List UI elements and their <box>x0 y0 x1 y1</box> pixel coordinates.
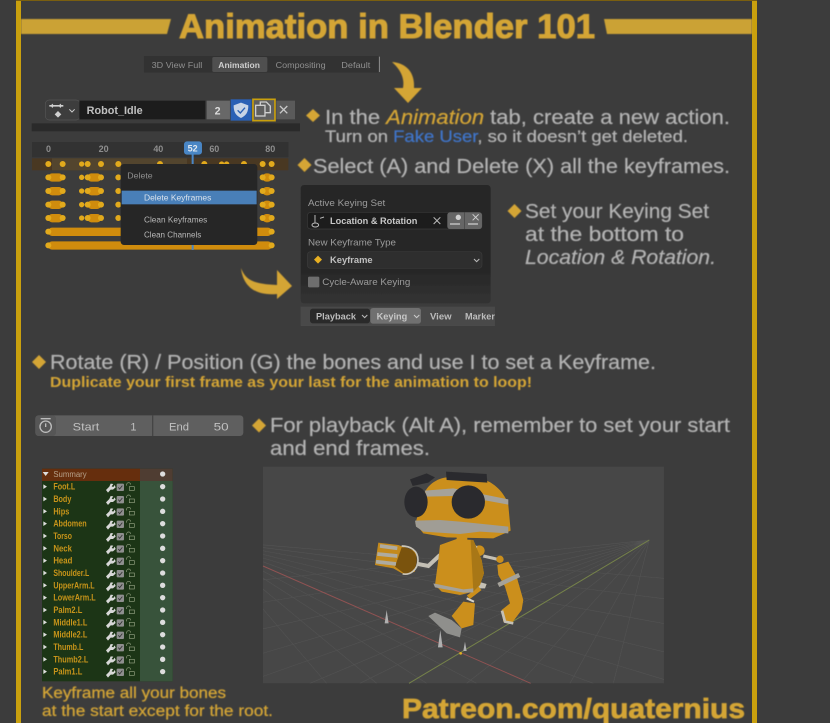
keyframe dots <box>45 161 275 248</box>
timeline with delete menu: 80 <box>265 144 275 154</box>
current frame marker: 52 <box>188 143 198 153</box>
channel rows: LowerArm.L <box>53 593 96 603</box>
workspace tabs: Default <box>341 60 371 70</box>
timeline with delete menu: 40 <box>153 144 163 154</box>
playback range bar: End <box>169 421 189 433</box>
body <box>433 536 484 595</box>
channel rows: Torso <box>53 531 72 541</box>
axes <box>263 566 531 683</box>
workspace tabs: Animation <box>218 60 260 70</box>
channel rows: Thumb2.L <box>53 654 89 664</box>
arrow: to keying panel <box>241 268 292 299</box>
arrow: down to tab text <box>392 62 422 103</box>
channel rows: Palm1.L <box>53 667 83 677</box>
bullet and text: rotate and position: Rotate (R) / Position (G) the bones and use I to set a Keyframe. <box>50 351 656 374</box>
action selector <box>32 99 300 131</box>
bullet and text: keying set: Set your Keying Set <box>525 200 709 223</box>
bullet and text: animation tab <box>306 106 730 146</box>
bone markers <box>385 610 467 651</box>
keying set popover: View <box>430 311 452 321</box>
floor grid <box>263 540 664 684</box>
current frame marker <box>184 141 202 155</box>
delete context menu: Delete Keyframes <box>144 192 211 202</box>
bullet and text: animation tab: In the Animation tab, create a new action. <box>325 106 730 129</box>
title left bar <box>21 19 171 34</box>
timeline with delete menu: 60 <box>209 144 219 154</box>
keying set popover: Cycle-Aware Keying <box>322 277 410 287</box>
action selector: 2 <box>215 105 221 117</box>
caption: keyframe bones: at the start except for the root. <box>42 703 273 720</box>
channel rows: Body <box>53 494 71 504</box>
caption: keyframe bones: Keyframe all your bones <box>42 685 226 702</box>
keying set popover <box>301 185 495 326</box>
bullet and text: playback <box>252 414 730 460</box>
bone channel list: Summary <box>53 470 87 479</box>
timeline with delete menu: 20 <box>99 144 109 154</box>
channel rows: Hips <box>53 506 69 516</box>
channel rows: Foot.L <box>53 482 76 492</box>
head lamps <box>404 472 487 519</box>
channel rows: UpperArm.L <box>53 580 95 590</box>
bullet and text: animation tab: Turn on Fake User , so it doesn’t get deleted. <box>325 127 688 146</box>
bullet and text: playback: For playback (Alt A), remember to set your start <box>270 414 730 437</box>
workspace tabs: Compositing <box>276 60 326 70</box>
channel rows: Shoulder.L <box>53 568 90 578</box>
delete context menu: Clean Keyframes <box>144 214 207 224</box>
timeline with delete menu: 0 <box>46 144 51 154</box>
bullet and text: rotate and position: Duplicate your first frame as your last for the animation to loop! <box>50 374 532 391</box>
channel rows: Abdomen <box>53 519 87 529</box>
channel rows: Neck <box>53 543 72 553</box>
playback range bar: Start <box>73 421 99 433</box>
delete context menu <box>121 164 257 245</box>
delete context menu: Clean Channels <box>144 229 201 239</box>
right arm <box>474 545 523 623</box>
action selector: Robot_Idle <box>87 105 143 117</box>
title right bar <box>604 19 752 34</box>
channel rows: Middle2.L <box>53 630 88 640</box>
playback range bar <box>35 415 243 436</box>
playback range bar: 1 <box>130 421 136 433</box>
playback range bar: 50 <box>214 421 229 433</box>
delete context menu: Delete <box>127 171 153 181</box>
bullet and text: keying set <box>508 200 716 269</box>
channel rows: Thumb.L <box>53 642 84 652</box>
bone channel list <box>42 469 173 681</box>
leg and foot <box>428 582 487 637</box>
robot <box>375 472 523 637</box>
keying set popover: New Keyframe Type <box>308 237 396 247</box>
workspace tabs: 3D View Full <box>152 60 202 70</box>
head <box>415 477 511 538</box>
channel rows <box>43 482 165 678</box>
caption: keyframe bones <box>42 685 273 720</box>
3D viewport with robot <box>262 467 664 684</box>
keying set popover: Keying <box>377 311 408 321</box>
bullet and text: playback: and end frames. <box>270 437 430 460</box>
bullet and text: keying set: Location & Rotation. <box>525 246 716 269</box>
keyframe bars <box>48 173 272 250</box>
keying set popover: Active Keying Set <box>308 198 386 208</box>
channel rows: Head <box>53 556 72 566</box>
title banner <box>21 8 752 46</box>
keying set popover: Keyframe <box>330 255 373 265</box>
keying set popover: Playback <box>316 311 357 321</box>
keying set popover: Location & Rotation <box>330 216 418 226</box>
left arm and hand <box>375 543 440 575</box>
keying set popover: Marker <box>465 311 495 321</box>
channel rows: Middle1.L <box>53 617 88 627</box>
title: Animation in Blender 101 <box>179 8 595 46</box>
bullet and text: rotate and position <box>32 351 656 391</box>
timeline with delete menu <box>32 141 288 250</box>
channel rows: Palm2.L <box>53 605 83 615</box>
bullet and text: select and delete: Select (A) and Delete (X) all the keyframes. <box>313 155 730 178</box>
bullet and text: keying set: at the bottom to <box>525 223 684 246</box>
workspace tabs <box>144 56 380 73</box>
